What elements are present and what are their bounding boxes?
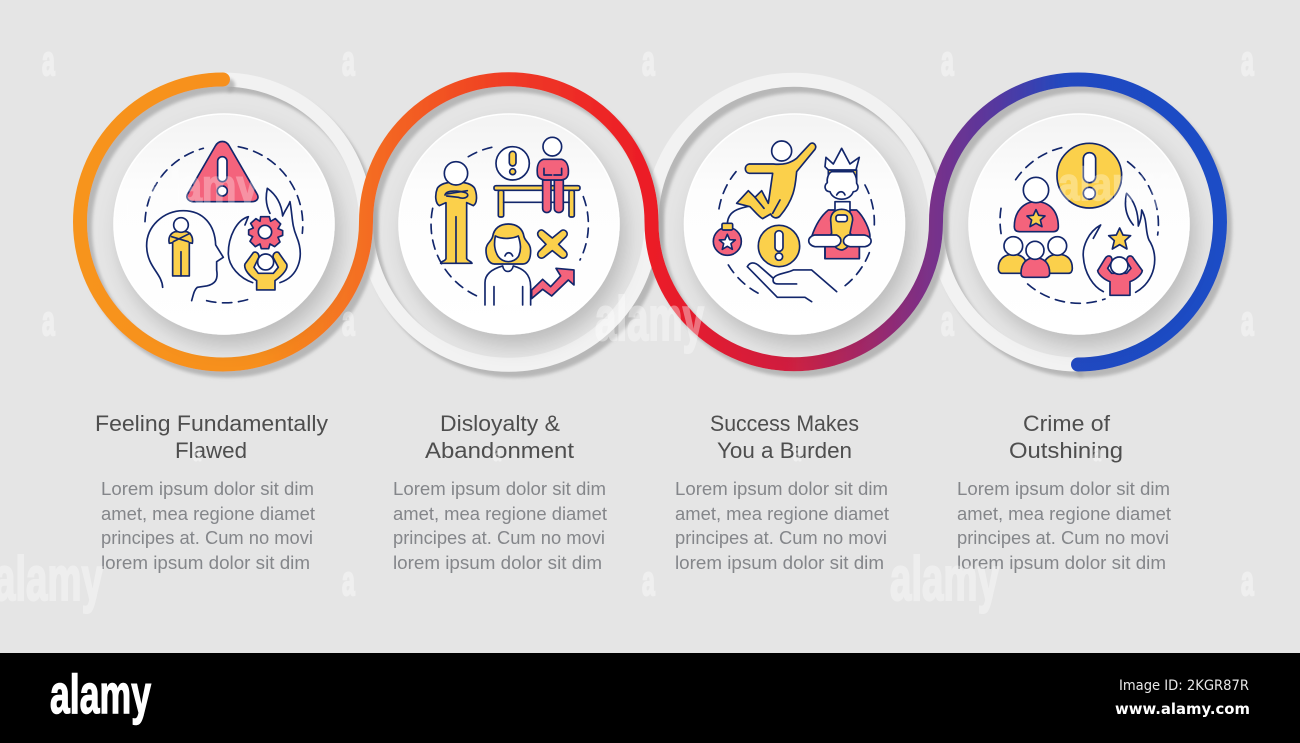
heading 2: Abandonment bbox=[425, 438, 574, 463]
text block: Disloyalty & Abandonment bbox=[393, 411, 607, 573]
body 3 bbox=[675, 478, 889, 573]
body 3: Lorem ipsum dolor sit dim bbox=[675, 478, 888, 499]
panel: circle 2 bbox=[399, 114, 619, 334]
watermark overlay: a bbox=[941, 38, 955, 85]
image id: Image ID: 2KGR87R bbox=[1119, 678, 1249, 694]
white disc 4 bbox=[969, 114, 1189, 334]
body 3: principes at. Cum no movi bbox=[675, 527, 887, 548]
white disc 1 bbox=[114, 114, 334, 334]
icon: star team, alert and flame bbox=[998, 143, 1158, 303]
white disc 3 bbox=[684, 114, 904, 334]
body 4: lorem ipsum dolor sit dim bbox=[957, 552, 1166, 573]
heading 3: You a Burden bbox=[717, 438, 852, 463]
body 4 bbox=[957, 478, 1171, 573]
panel: circle 3 bbox=[684, 114, 904, 334]
icon: bench, crossed arms man, sad woman bbox=[431, 137, 588, 305]
heading 4: Outshining bbox=[1009, 438, 1123, 463]
heading 1: Flawed bbox=[175, 438, 247, 463]
watermark overlay: alamy bbox=[148, 160, 258, 212]
watermark overlay: a bbox=[342, 298, 356, 345]
website: www.alamy.com bbox=[1115, 700, 1250, 718]
body 2: principes at. Cum no movi bbox=[393, 527, 605, 548]
watermark overlay: a bbox=[1241, 38, 1255, 85]
body 2: lorem ipsum dolor sit dim bbox=[393, 552, 602, 573]
body 2 bbox=[393, 478, 607, 573]
white disc 2 bbox=[399, 114, 619, 334]
watermark overlay: a bbox=[42, 298, 56, 345]
heading 3: Success Makes bbox=[710, 411, 859, 436]
watermark overlay: a bbox=[941, 298, 955, 345]
body 4: principes at. Cum no movi bbox=[957, 527, 1169, 548]
heading 1 bbox=[95, 411, 328, 463]
body 1: lorem ipsum dolor sit dim bbox=[101, 552, 310, 573]
watermark overlay: a bbox=[193, 440, 202, 467]
body 1: amet, mea regione diamet bbox=[101, 503, 315, 524]
watermark overlay: a bbox=[1241, 558, 1255, 605]
watermark overlay: alamy bbox=[890, 545, 999, 614]
body 1 bbox=[101, 478, 315, 573]
footer logo: alamy bbox=[50, 663, 151, 725]
heading 2 bbox=[425, 411, 574, 463]
watermark overlay: a bbox=[42, 38, 56, 85]
watermark overlay: a bbox=[793, 440, 802, 467]
text block: Feeling Fundamentally Flawed bbox=[95, 411, 328, 573]
body 2: amet, mea regione diamet bbox=[393, 503, 607, 524]
heading 1: Feeling Fundamentally bbox=[95, 411, 328, 436]
watermark overlay: a bbox=[1241, 298, 1255, 345]
watermark overlay: alamy bbox=[1058, 158, 1168, 210]
body 4: amet, mea regione diamet bbox=[957, 503, 1171, 524]
heading 4: Crime of bbox=[1023, 411, 1111, 436]
watermark overlay: a bbox=[1093, 440, 1102, 467]
watermark overlay: a bbox=[342, 38, 356, 85]
panel: circle 1 bbox=[114, 114, 334, 334]
body 3: amet, mea regione diamet bbox=[675, 503, 889, 524]
icon: jumper with ball, king, hand bbox=[713, 141, 874, 302]
heading 4 bbox=[1009, 411, 1123, 463]
icon: warning, head and burnout bbox=[145, 141, 303, 303]
gradient ribbon connecting the four circles bbox=[80, 79, 1220, 364]
body 4: Lorem ipsum dolor sit dim bbox=[957, 478, 1170, 499]
body 1: principes at. Cum no movi bbox=[101, 527, 313, 548]
body 3: lorem ipsum dolor sit dim bbox=[675, 552, 884, 573]
heading 3 bbox=[710, 411, 859, 463]
panel: circle 4 bbox=[969, 114, 1189, 334]
watermark overlay: alamy bbox=[595, 285, 704, 354]
watermark overlay: a bbox=[642, 558, 656, 605]
watermark overlay: a bbox=[493, 440, 502, 467]
light grey ring segments bbox=[223, 80, 1078, 365]
body 1: Lorem ipsum dolor sit dim bbox=[101, 478, 314, 499]
footer bar bbox=[0, 653, 1300, 743]
watermark overlay bbox=[0, 38, 1255, 614]
text block: Success Makes You a Burden bbox=[675, 411, 889, 573]
text block: Crime of Outshining bbox=[957, 411, 1171, 573]
heading 2: Disloyalty & bbox=[440, 411, 560, 436]
watermark overlay: a bbox=[342, 558, 356, 605]
watermark overlay: a bbox=[642, 38, 656, 85]
body 2: Lorem ipsum dolor sit dim bbox=[393, 478, 606, 499]
